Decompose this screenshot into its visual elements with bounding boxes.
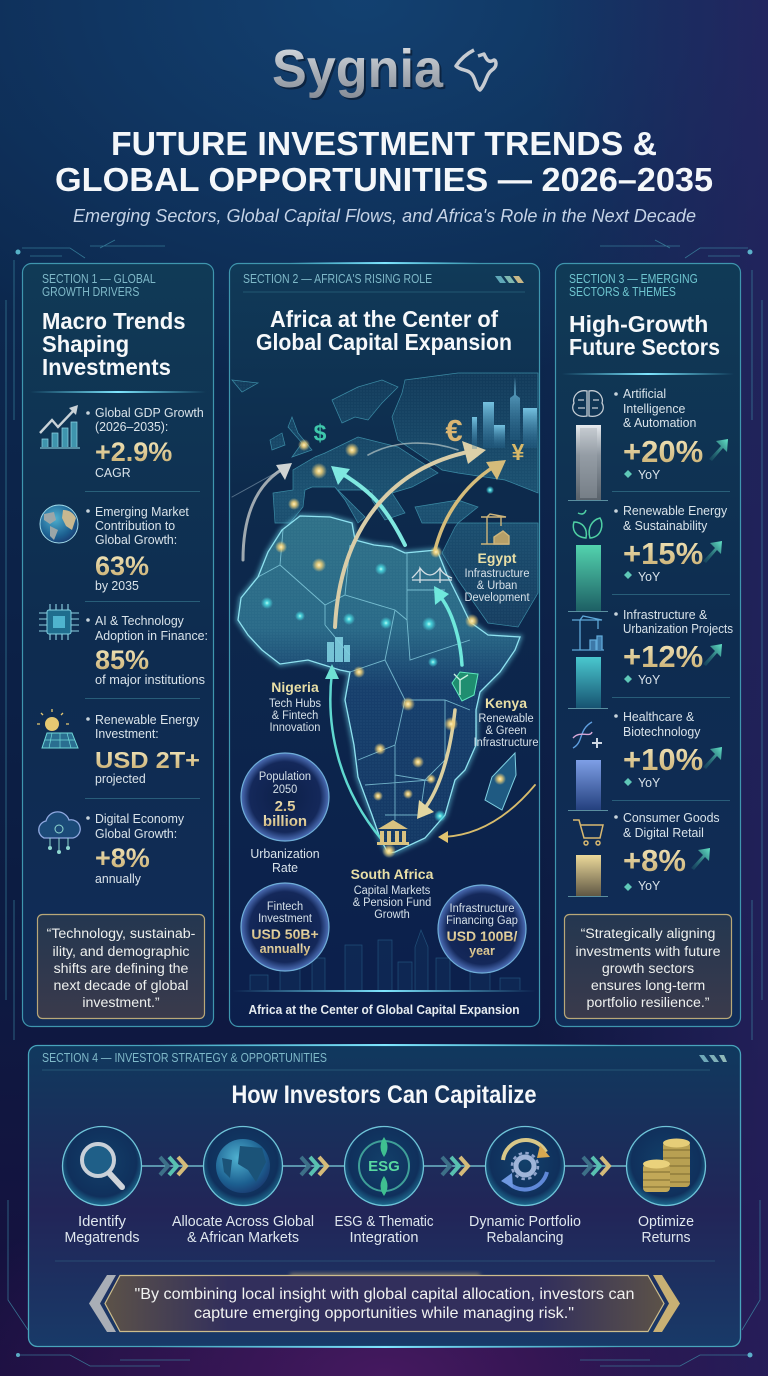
stat: emerging market contribution bbox=[40, 505, 189, 593]
sector: renewable: YoY bbox=[638, 570, 661, 584]
callout banner: closing quote: capture emerging opportunities while managing risk." bbox=[194, 1305, 574, 1322]
label: South Africa: Growth bbox=[374, 909, 410, 921]
Africa bbox=[238, 516, 520, 853]
sector: AI: Artificial bbox=[623, 387, 666, 401]
callout: strategy quote: ensures long-term bbox=[591, 978, 705, 994]
logo: Sygnia wordmark with Africa mark: Sygnia bbox=[272, 39, 444, 99]
callout: technology quote: “Technology, sustainab- bbox=[47, 926, 196, 942]
label: South Africa: & Pension Fund bbox=[353, 897, 431, 909]
step: rebalancing bbox=[469, 1126, 581, 1246]
flow arrows bbox=[232, 443, 535, 840]
icon: Nigeria towers bbox=[327, 637, 350, 662]
step: allocate bbox=[172, 1126, 314, 1246]
heading: Africa at the Center: Global Capital Expansion bbox=[256, 329, 512, 355]
label: urbanization rate: Rate bbox=[272, 861, 298, 875]
label: Egypt: & Urban bbox=[477, 580, 517, 592]
section 1 label bbox=[42, 273, 156, 299]
heading: High-Growth bbox=[569, 311, 720, 360]
icon: globe bbox=[40, 505, 78, 543]
label: Kenya: Kenya bbox=[485, 695, 527, 711]
footer caption: Africa at the Center of Global Capital Expansion bbox=[248, 1002, 520, 1017]
label: Nigeria: & Fintech bbox=[272, 710, 318, 722]
heading: High-Growth: High-Growth bbox=[569, 311, 708, 337]
bubble: infrastructure gap bbox=[438, 885, 526, 973]
bar: infrastructure bbox=[576, 657, 601, 708]
stat: emerging market contribution: 63% bbox=[95, 551, 149, 581]
bar: consumer bbox=[576, 855, 601, 896]
map of Africa with capital flows bbox=[232, 373, 538, 858]
sector: AI: +20% bbox=[623, 434, 703, 469]
panel: section 4 investor strategy bbox=[28, 1044, 740, 1348]
stat: GDP growth: CAGR bbox=[95, 466, 131, 480]
icon: cart bbox=[573, 820, 603, 845]
Madagascar bbox=[485, 753, 516, 810]
callout: technology quote: shifts are defining the bbox=[54, 961, 189, 977]
bubble: population: billion bbox=[263, 813, 307, 830]
logo: Sygnia wordmark with Africa mark: Sygnia bbox=[274, 41, 446, 101]
label: Kenya: Renewable bbox=[478, 713, 534, 725]
bubble: population: 2.5 bbox=[275, 798, 295, 815]
section 1 label: GROWTH DRIVERS bbox=[42, 286, 140, 299]
title: GLOBAL OPPORTUNITIES — 2026–2035 bbox=[55, 161, 713, 198]
section 1 label: SECTION 1 — GLOBAL bbox=[42, 273, 156, 286]
icon: Kenya wind turbine bbox=[452, 672, 478, 701]
sector: renewable: +15% bbox=[623, 536, 703, 571]
sector: AI: & Automation bbox=[623, 416, 696, 430]
stat: digital economy: Digital Economy bbox=[95, 812, 185, 826]
icon: crane bbox=[572, 616, 604, 650]
callout banner: closing quote bbox=[89, 1274, 680, 1332]
stat: AI adoption: 85% bbox=[95, 645, 149, 675]
title bbox=[55, 125, 713, 198]
stat: renewable investment bbox=[37, 709, 200, 786]
sector: consumer: Consumer Goods bbox=[623, 811, 720, 825]
label: Kenya: & Green bbox=[485, 725, 527, 737]
stat: renewable investment: Investment: bbox=[95, 727, 159, 741]
arrow up bbox=[709, 439, 728, 461]
sector: AI bbox=[568, 387, 728, 500]
stat: GDP growth: Global GDP Growth bbox=[95, 406, 204, 420]
section 2 label: SECTION 2 — AFRICA'S RISING ROLE bbox=[243, 273, 432, 286]
label: Nigeria: Tech Hubs bbox=[269, 698, 321, 710]
label: Nigeria: Innovation bbox=[270, 722, 320, 734]
label: Kenya: Infrastructure bbox=[474, 737, 538, 749]
stat: renewable investment: USD 2T+ bbox=[95, 747, 200, 773]
step: identify megatrends bbox=[62, 1126, 142, 1246]
heading: How Investors Can Capitalize: How Investors Can Capitalize bbox=[232, 1081, 537, 1109]
bar: renewable bbox=[576, 545, 601, 611]
country borders bbox=[258, 530, 470, 820]
heading: Macro Trends bbox=[42, 307, 186, 380]
section 3 label: SECTION 3 — EMERGING bbox=[569, 273, 698, 286]
stat: digital economy bbox=[39, 812, 185, 886]
sector: AI: YoY bbox=[638, 468, 661, 482]
icon: leaves bbox=[573, 510, 602, 538]
currency symbols: $ bbox=[314, 420, 327, 446]
callout: strategy quote: portfolio resilience.” bbox=[586, 995, 710, 1011]
step: ESG bbox=[334, 1126, 434, 1246]
stat: emerging market contribution: Emerging Market bbox=[95, 505, 189, 519]
stat: GDP growth: (2026–2035): bbox=[95, 420, 168, 434]
heading: High-Growth: Future Sectors bbox=[569, 334, 720, 360]
step: optimize: Optimize bbox=[638, 1213, 694, 1230]
label: South Africa: Capital Markets bbox=[354, 885, 431, 897]
stat: emerging market contribution: Contribution to bbox=[95, 519, 175, 533]
bottom skyline decoration bbox=[250, 930, 520, 990]
icon: solar and sun bbox=[37, 709, 78, 748]
label: Egypt: Infrastructure bbox=[465, 568, 529, 580]
sector: renewable: Renewable Energy bbox=[623, 504, 728, 518]
chevrons between steps bbox=[160, 1157, 609, 1175]
callout: strategy quote: “Strategically aligning bbox=[581, 926, 715, 942]
label: Egypt bbox=[465, 550, 530, 604]
callout: technology quote: investment.” bbox=[82, 995, 160, 1011]
stat: emerging market contribution: by 2035 bbox=[95, 579, 139, 593]
step: rebalancing: Dynamic Portfolio bbox=[469, 1213, 581, 1230]
heading: Africa at the Center: Africa at the Center of bbox=[270, 306, 498, 332]
currency symbols: ¥ bbox=[512, 439, 525, 465]
stat: AI adoption: AI & Technology bbox=[95, 614, 185, 628]
step: identify megatrends: Megatrends bbox=[64, 1229, 140, 1246]
stat: digital economy: annually bbox=[95, 872, 142, 886]
step: allocate: Allocate Across Global bbox=[172, 1213, 314, 1230]
bubble: fintech investment: USD 50B+ bbox=[251, 926, 319, 942]
sector: renewable bbox=[568, 504, 728, 612]
sector: consumer bbox=[568, 811, 720, 896]
Asia skyline bbox=[472, 377, 537, 449]
stat: renewable investment: Renewable Energy bbox=[95, 713, 200, 727]
step: identify megatrends: Identify bbox=[78, 1213, 126, 1230]
arrow up bbox=[691, 848, 710, 870]
step: ESG: ESG & Thematic bbox=[334, 1213, 434, 1230]
stat: AI adoption: Adoption in Finance: bbox=[95, 628, 208, 643]
mini chevrons bbox=[495, 276, 524, 283]
label: urbanization rate bbox=[250, 847, 320, 875]
arrow up bbox=[703, 644, 722, 666]
label: South Africa bbox=[351, 866, 434, 921]
bubble: fintech investment: Fintech bbox=[267, 901, 303, 913]
step: allocate: & African Markets bbox=[187, 1229, 299, 1246]
sector: consumer: YoY bbox=[638, 879, 661, 893]
sector: healthcare: +10% bbox=[623, 742, 703, 777]
label: Nigeria: Nigeria bbox=[271, 679, 319, 695]
sector: healthcare: Healthcare & bbox=[623, 710, 695, 724]
chevron left bbox=[89, 1275, 116, 1332]
arrow up bbox=[703, 747, 722, 769]
sector: healthcare bbox=[568, 710, 722, 810]
callout: technology quote: ility, and demographic bbox=[53, 944, 189, 960]
sector: AI: Intelligence bbox=[623, 402, 685, 416]
bubble: population: 2050 bbox=[273, 784, 297, 796]
section 3 label bbox=[569, 273, 698, 299]
currency symbols: € bbox=[445, 413, 463, 448]
step: rebalancing: Rebalancing bbox=[486, 1229, 564, 1246]
map city lights bbox=[261, 439, 506, 858]
bubble: population bbox=[241, 753, 329, 841]
label: Egypt: Egypt bbox=[478, 550, 517, 566]
callout: technology quote bbox=[38, 914, 204, 1018]
section 3 label: SECTORS & THEMES bbox=[569, 286, 676, 299]
section 4 label: SECTION 4 — INVESTOR STRATEGY & OPPORTUNITIES bbox=[42, 1051, 327, 1065]
Eurasia bbox=[232, 373, 538, 627]
callout: strategy quote: growth sectors bbox=[602, 961, 694, 977]
icon: magnifier bbox=[82, 1144, 122, 1187]
sector: consumer: & Digital Retail bbox=[623, 826, 704, 840]
callout: strategy quote bbox=[564, 914, 732, 1018]
bubble: infrastructure gap: Infrastructure bbox=[450, 903, 514, 915]
icon: DNA with plus bbox=[573, 722, 602, 748]
sector: infrastructure: +12% bbox=[623, 639, 703, 674]
sector: renewable: & Sustainability bbox=[623, 519, 708, 533]
label: Kenya bbox=[474, 695, 538, 749]
heading: Macro Trends: Macro Trends bbox=[42, 307, 186, 334]
callout: technology quote: next decade of global bbox=[54, 978, 188, 994]
mini chevrons bbox=[699, 1055, 727, 1062]
icon: brain bbox=[573, 391, 603, 416]
heading: Africa at the Center bbox=[256, 306, 512, 355]
stat: renewable investment: projected bbox=[95, 772, 146, 786]
step: ESG: Integration bbox=[350, 1229, 418, 1246]
step: optimize: Returns bbox=[642, 1229, 690, 1246]
label: urbanization rate: Urbanization bbox=[250, 847, 320, 861]
sector: healthcare: YoY bbox=[638, 776, 661, 790]
bubble: fintech investment bbox=[241, 883, 329, 971]
step: optimize bbox=[626, 1126, 706, 1246]
icon: coins bbox=[643, 1138, 690, 1192]
icon: chip bbox=[39, 604, 79, 640]
callout banner: closing quote: "By combining local insight with global capital allocation, investors can bbox=[134, 1286, 634, 1303]
arrow up bbox=[703, 541, 722, 563]
subtitle: Emerging Sectors, Global Capital Flows, and Africa's Role in the Next Decade bbox=[73, 206, 696, 226]
stat: digital economy: +8% bbox=[95, 843, 150, 873]
stat: AI adoption: of major institutions bbox=[95, 672, 205, 687]
icon: gear with arrows bbox=[501, 1140, 550, 1190]
callout: strategy quote: investments with future bbox=[575, 944, 721, 960]
icon: growth chart bbox=[40, 405, 80, 448]
sector: consumer: +8% bbox=[623, 843, 686, 878]
panel: section 1 macro trends bbox=[22, 264, 214, 1026]
bar: healthcare bbox=[576, 760, 601, 810]
bubble: infrastructure gap: Financing Gap bbox=[446, 915, 518, 927]
sector: infrastructure bbox=[568, 608, 733, 708]
icon: cloud network bbox=[39, 812, 80, 854]
icon: South Africa bank bbox=[377, 820, 409, 845]
title: FUTURE INVESTMENT TRENDS & bbox=[111, 125, 657, 162]
currency symbols bbox=[314, 413, 525, 465]
stat: AI adoption bbox=[39, 604, 208, 687]
bubble: infrastructure gap: year bbox=[469, 944, 495, 958]
icon: Egypt crane bbox=[481, 514, 509, 544]
label: Egypt: Development bbox=[465, 592, 530, 604]
stat: GDP growth: +2.9% bbox=[95, 437, 172, 467]
bubble: fintech investment: annually bbox=[260, 942, 310, 956]
panel: section 2 Africa bbox=[230, 262, 540, 1026]
sector: infrastructure: YoY bbox=[638, 673, 661, 687]
heading: Macro Trends: Shaping bbox=[42, 330, 129, 357]
stat: GDP growth bbox=[40, 405, 204, 480]
label: Nigeria bbox=[269, 679, 321, 734]
icon: bridge bbox=[412, 568, 452, 583]
sector: infrastructure: Urbanization Projects bbox=[623, 621, 733, 636]
sector: healthcare: Biotechnology bbox=[623, 725, 701, 739]
panel: section 3 sectors bbox=[556, 264, 740, 1026]
sector: infrastructure: Infrastructure & bbox=[623, 608, 708, 622]
stat: emerging market contribution: Global Growth: bbox=[95, 533, 177, 547]
icon: globe bbox=[216, 1139, 270, 1193]
icon: ESG emblem: ESG bbox=[368, 1158, 400, 1175]
chevron right bbox=[653, 1275, 680, 1332]
bar: AI bbox=[576, 425, 601, 500]
bubble: infrastructure gap: USD 100B/ bbox=[447, 928, 518, 944]
stat: digital economy: Global Growth: bbox=[95, 827, 177, 841]
label: South Africa: South Africa bbox=[351, 866, 434, 882]
bubble: fintech investment: Investment bbox=[258, 913, 313, 925]
heading: Macro Trends: Investments bbox=[42, 353, 171, 380]
connector lines bbox=[142, 1165, 626, 1167]
bubble: population: Population bbox=[259, 771, 311, 783]
